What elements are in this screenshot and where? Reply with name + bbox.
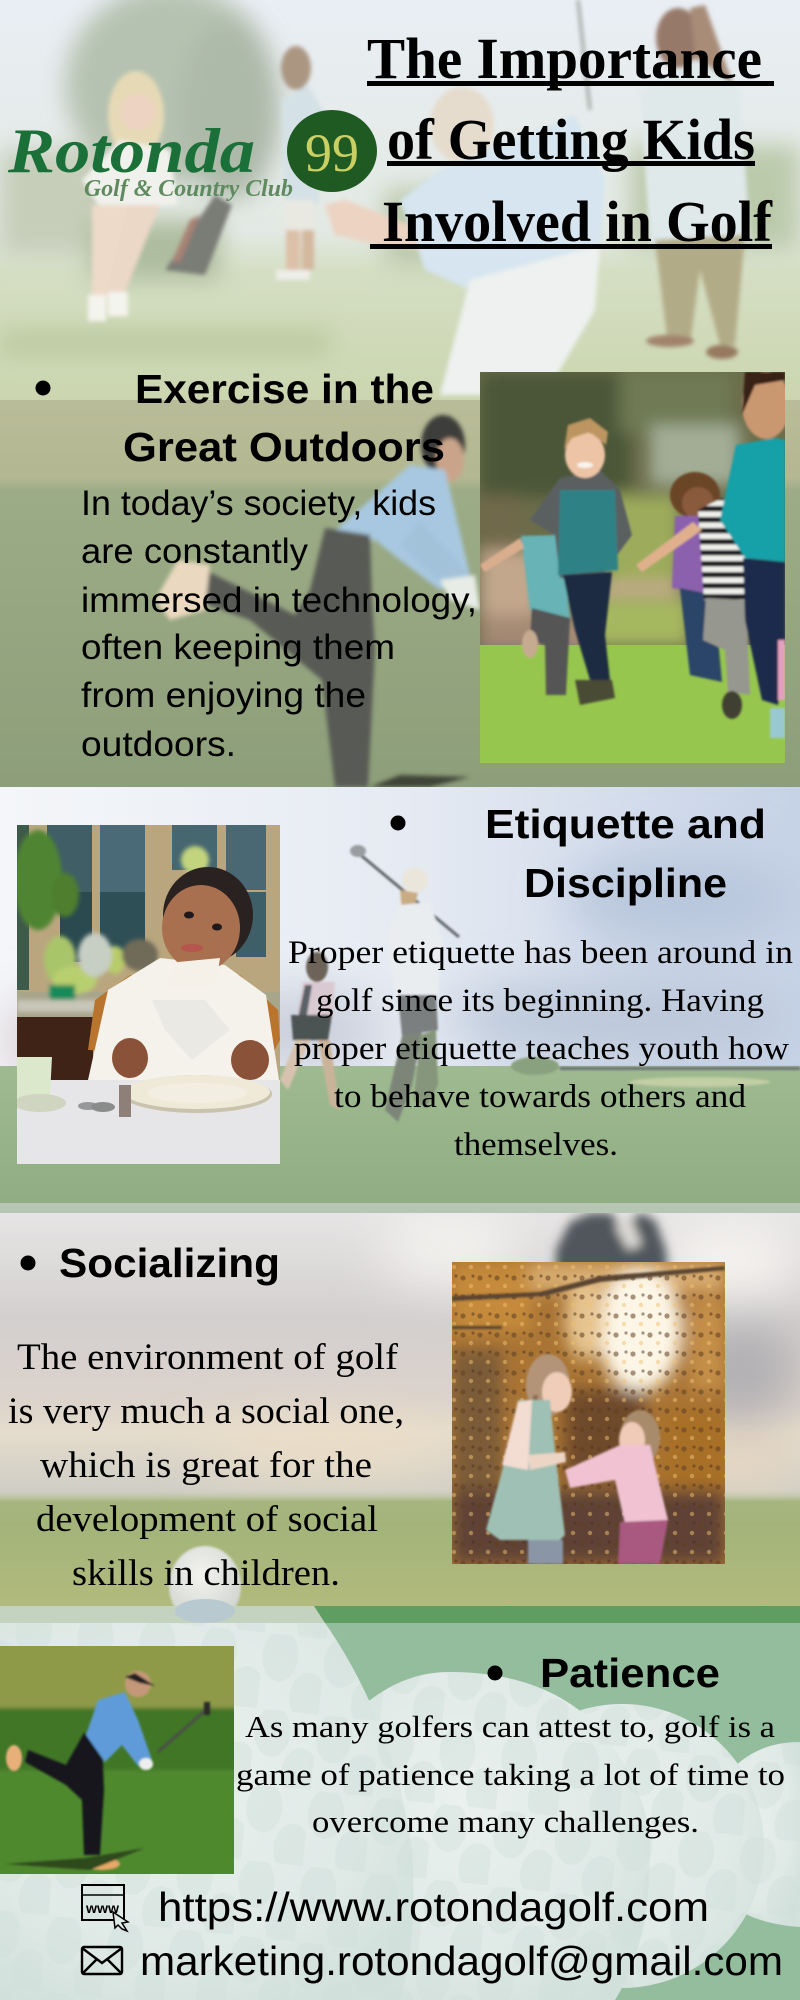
strip: transition band above patience [0, 1599, 800, 1623]
heading: etiquette and discipline: Discipline [524, 860, 727, 906]
front shoe [84, 1858, 120, 1870]
heading: exercise in the great outdoors [36, 366, 445, 470]
trousers [25, 1733, 104, 1855]
shirt [86, 1692, 152, 1766]
man from behind [281, 46, 311, 90]
panel: socializing sunset background [0, 1205, 800, 1626]
photo: girl at formal dinner table [14, 825, 280, 1164]
logo tagline: Golf & Country Club [84, 176, 293, 202]
heading: patience: Patience [540, 1650, 720, 1696]
text: website address: https://www.rotondagolf.com [158, 1884, 709, 1930]
text block: socializing body: development of social [36, 1499, 378, 1540]
smaller girl [620, 1410, 660, 1466]
title: The Importance [367, 26, 762, 91]
logo: Rotonda Golf and Country Club [7, 110, 377, 202]
icon: website browser window with cursor [82, 1885, 128, 1931]
heading: etiquette and discipline: Etiquette and [485, 801, 766, 847]
text block: etiquette body: proper etiquette teaches youth how [294, 1031, 789, 1067]
text block: etiquette body: to behave towards others and [334, 1079, 747, 1115]
golf ball large left [0, 1623, 414, 2000]
bag [165, 195, 232, 275]
heading: exercise in the great outdoors: Exercise in the [135, 366, 434, 412]
title [367, 26, 774, 254]
strip: transition band under etiquette [0, 1203, 800, 1213]
text block: socializing body: is very much a social one, [8, 1391, 404, 1432]
text block: etiquette body [288, 935, 793, 1163]
text block: exercise body: outdoors. [81, 725, 236, 764]
logo 99 badge: 99 [305, 123, 359, 183]
glove [139, 1758, 153, 1770]
heading: exercise in the great outdoors: Great Outdoors [123, 424, 445, 470]
photo: kids running on grass [480, 371, 790, 763]
text block: exercise body: are constantly [81, 532, 309, 571]
title: of Getting Kids [387, 107, 755, 172]
text block: etiquette body: themselves. [454, 1127, 618, 1163]
chair [88, 975, 280, 1055]
panel: second golfer photo background [0, 400, 800, 787]
panel: golf balls background [0, 1623, 800, 2000]
text block: socializing body: which is great for the [40, 1445, 372, 1486]
text block: patience body [236, 1709, 785, 1839]
back shoe [6, 1745, 22, 1771]
icon: website browser window with cursor: www [85, 1900, 119, 1916]
club [158, 1708, 208, 1752]
golf ball right [580, 1704, 764, 1988]
text block: socializing body: The environment of golf [17, 1337, 399, 1378]
text block: exercise body: often keeping them [81, 628, 395, 667]
heading: etiquette and discipline [390, 801, 766, 906]
silhouette couple [548, 1213, 674, 1262]
hands [112, 1038, 148, 1078]
icon: golfer head and torso [421, 415, 465, 475]
table and place setting [17, 1080, 280, 1164]
title: Involved in Golf [382, 189, 773, 254]
text block: exercise body [81, 484, 477, 764]
young golfer [306, 952, 328, 982]
text block: exercise body: immersed in technology, [81, 581, 477, 620]
text block: patience body: overcome many challenges. [312, 1804, 699, 1839]
standing man [656, 8, 700, 68]
distant fence and bush [511, 1057, 559, 1075]
striped child [698, 498, 748, 602]
golf ball far right [738, 1742, 800, 1927]
photo: two girls holding hands at sunset [452, 1262, 725, 1564]
text block: socializing body [8, 1337, 404, 1594]
text block: exercise body: from enjoying the [81, 676, 366, 715]
jacket [88, 958, 279, 1080]
older golfer [357, 852, 459, 937]
trousers and legs [195, 528, 375, 787]
text: email address: marketing.rotondagolf@gmail.com [140, 1938, 783, 1984]
icon: envelope [82, 1947, 122, 1974]
text block: socializing body: skills in children. [72, 1553, 340, 1594]
text block: patience body: As many golfers can attest to, golf is a [245, 1709, 775, 1744]
face and hair [163, 867, 253, 963]
taller girl [526, 1354, 570, 1416]
curly girl [670, 472, 720, 518]
text block: patience body: game of patience taking a lot of time to [236, 1757, 785, 1792]
head [125, 1671, 151, 1697]
panel: etiquette background photo [0, 787, 800, 1203]
tall girl [742, 371, 790, 439]
golf ball on tee [168, 1544, 242, 1606]
woman [108, 71, 164, 159]
text block: exercise body: In today’s society, kids [81, 484, 436, 523]
heading: socializing: Socializing [59, 1240, 280, 1286]
panel: header golf photo background [0, 0, 800, 400]
smiling boy [530, 470, 632, 578]
golf ball centre [369, 1672, 650, 2000]
back child [521, 535, 570, 618]
text block: etiquette body: golf since its beginning. Having [316, 983, 764, 1019]
crouching man [430, 87, 494, 163]
logo 99 badge [287, 110, 377, 192]
logo wordmark: Rotonda [7, 115, 255, 186]
photo: golfer following through on swing [0, 1640, 240, 1880]
eyes and mouth [181, 912, 222, 952]
text block: etiquette body: Proper etiquette has been around in [288, 935, 793, 971]
